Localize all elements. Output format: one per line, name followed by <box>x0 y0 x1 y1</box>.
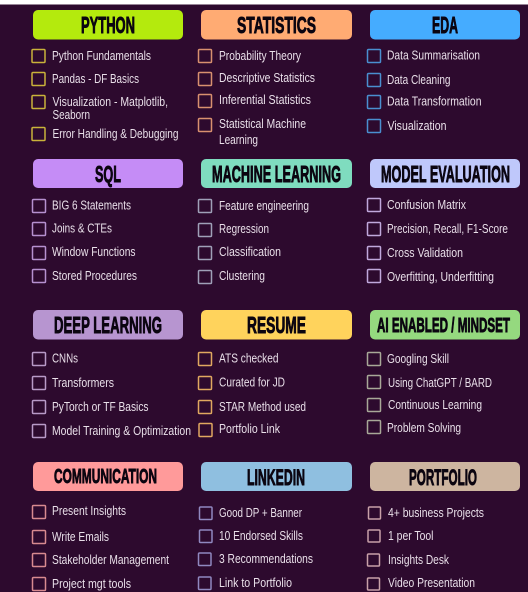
item: 3 Recommendations: 3 Recommendations <box>219 552 313 566</box>
item: Model Training & Optimization: Model Training & Optimization <box>52 424 191 438</box>
item: Good DP + Banner <box>200 506 302 520</box>
panel: AI Enabled / Mindset <box>368 310 520 435</box>
heading: Machine Learning <box>201 159 352 188</box>
heading: Python <box>33 10 183 40</box>
item: Statistical Machine Learning: Statistical Machine <box>219 117 306 131</box>
item: Using ChatGPT / BARD <box>368 376 492 390</box>
item: Probability Theory <box>198 49 302 63</box>
item: BIG 6 Statements <box>32 198 131 212</box>
item: Link to Portfolio <box>198 576 292 590</box>
item: Descriptive Statistics <box>198 71 315 86</box>
item: Descriptive Statistics: Descriptive Statistics <box>219 71 315 85</box>
item: Pandas: Pandas - DF Basics <box>52 72 139 86</box>
item: Feature engineering <box>198 199 309 213</box>
item: Stored Procedures: Stored Procedures <box>52 269 137 283</box>
item: Visualization: Visualization <box>388 119 447 133</box>
panel: Model Evaluation <box>368 159 520 284</box>
item: Stakeholder Management: Stakeholder Management <box>52 553 169 567</box>
item: Confusion Matrix: Confusion Matrix <box>387 198 467 212</box>
item: Write Emails <box>32 530 109 544</box>
item: Problem Solving <box>368 420 461 435</box>
heading: Resume <box>201 310 352 340</box>
item: Present Insights: Present Insights <box>52 504 126 518</box>
item: Data Summarisation: Data Summarisation <box>387 48 480 62</box>
item: Error Handling: Error Handling & Debugging <box>52 127 179 141</box>
item: Cross Validation: Cross Validation <box>387 246 463 260</box>
item: Insights Desk <box>368 553 450 567</box>
item: 10 Endorsed Skills <box>200 529 303 543</box>
item: Window Functions <box>32 245 136 260</box>
item: Continuous Learning <box>368 398 482 412</box>
item: Link to Portfolio: Link to Portfolio <box>219 576 292 590</box>
item: Insights Desk: Insights Desk <box>388 553 450 567</box>
item: BIG 6 Statements: BIG 6 Statements <box>52 198 131 212</box>
item: Googling Skill: Googling Skill <box>387 352 449 366</box>
item: Transformers: Transformers <box>52 376 114 390</box>
panel: Portfolio <box>368 462 520 590</box>
item: Statistical Machine Learning <box>198 117 306 147</box>
item: Problem Solving: Problem Solving <box>387 421 461 435</box>
heading: Statistics: STATISTICS <box>237 12 316 38</box>
item: Probability Theory: Probability Theory <box>219 49 302 63</box>
item: PyTorch or TF Basics <box>32 400 148 414</box>
heading: Statistics <box>201 10 352 40</box>
heading: Deep Learning <box>33 310 183 340</box>
heading: Portfolio <box>370 462 520 491</box>
panel: Communication <box>32 462 183 591</box>
item: 10 Endorsed Skills: 10 Endorsed Skills <box>219 529 303 543</box>
item: Video Presentation: Video Presentation <box>388 576 475 590</box>
panel: Resume <box>198 310 352 436</box>
item: Portfolio Link <box>199 422 281 436</box>
item: Window Functions: Window Functions <box>52 245 136 259</box>
heading: LinkedIn <box>201 462 352 491</box>
heading: Resume: RESUME <box>247 312 306 338</box>
heading: Deep Learning: DEEP LEARNING <box>54 312 162 338</box>
item: Joins & CTEs <box>32 222 112 236</box>
panel: Deep Learning <box>32 310 191 438</box>
item: CNNs: CNNs <box>52 352 78 366</box>
item: Googling Skill <box>368 352 449 366</box>
item: Video Presentation <box>368 576 475 590</box>
item: Regression: Regression <box>219 222 269 236</box>
item: Present Insights <box>32 504 126 518</box>
heading: Communication: COMMUNICATION <box>54 465 157 488</box>
item: 1 per Tool: 1 per Tool <box>388 529 434 543</box>
item: Visualization <box>368 119 447 133</box>
item: Clustering <box>198 269 265 284</box>
item: STAR Method used: STAR Method used <box>219 400 306 414</box>
heading: Machine Learning: MACHINE LEARNING <box>212 161 341 187</box>
item: Regression <box>198 222 269 236</box>
panel: EDA <box>368 10 520 133</box>
item: Classification: Classification <box>219 245 281 259</box>
item: ATS checked: ATS checked <box>219 352 279 366</box>
panel: SQL <box>32 159 183 283</box>
item: 1 per Tool <box>368 529 434 543</box>
heading: Communication <box>33 462 183 491</box>
item: Write Emails: Write Emails <box>52 530 109 544</box>
item: Overfitting, Underfitting: Overfitting, Underfitting <box>387 270 494 284</box>
item: Inferential Statistics <box>198 93 311 108</box>
item: Continuous Learning: Continuous Learning <box>388 398 482 412</box>
item: Transformers <box>32 376 114 390</box>
item: 4+ business Projects: 4+ business Projects <box>388 506 484 520</box>
item: Feature engineering: Feature engineering <box>219 199 309 213</box>
item: Project mgt tools: Project mgt tools <box>52 577 131 591</box>
panel: Statistics <box>198 10 352 147</box>
heading: EDA <box>370 10 520 40</box>
item: PyTorch or TF Basics: PyTorch or TF Basics <box>52 400 148 414</box>
item: Clustering: Clustering <box>219 269 265 283</box>
item: Curated for JD <box>198 376 285 390</box>
item: Data Cleaning: Data Cleaning <box>387 73 451 87</box>
item: Statistical Machine Learning: Learning <box>219 133 258 147</box>
item: Stored Procedures <box>32 269 137 283</box>
item: 3 Recommendations <box>198 552 313 566</box>
heading: EDA: EDA <box>432 12 458 38</box>
item: Portfolio Link: Portfolio Link <box>219 422 281 436</box>
item: Python Fundamentals: Python Fundamentals <box>52 49 151 63</box>
panel: Python <box>32 10 183 141</box>
heading: SQL: SQL <box>95 161 121 187</box>
panel: LinkedIn <box>198 462 352 590</box>
heading: SQL <box>33 159 183 188</box>
item: Curated for JD: Curated for JD <box>219 376 285 390</box>
item: Using ChatGPT / BARD: Using ChatGPT / BARD <box>388 376 492 390</box>
item: Visualization: Seaborn <box>52 108 90 122</box>
item: Data Transformation: Data Transformation <box>387 94 482 108</box>
item: Visualization <box>32 95 168 122</box>
item: CNNs <box>32 352 78 366</box>
item: Pandas <box>32 72 139 86</box>
item: Python Fundamentals <box>32 49 151 63</box>
item: Inferential Statistics: Inferential Statistics <box>219 93 311 107</box>
item: Good DP + Banner: Good DP + Banner <box>219 506 302 520</box>
item: STAR Method used <box>198 400 306 414</box>
item: ATS checked <box>198 352 279 366</box>
item: Joins & CTEs: Joins & CTEs <box>52 222 112 236</box>
item: Visualization: Visualization - Matplotlib, <box>52 95 168 109</box>
panel: Machine Learning <box>198 159 352 284</box>
item: Cross Validation <box>368 246 463 260</box>
heading: Python: PYTHON <box>81 12 135 38</box>
item: Classification <box>198 245 281 260</box>
heading: LinkedIn: LINKEDIN <box>247 465 305 490</box>
item: Data Cleaning <box>368 73 451 87</box>
